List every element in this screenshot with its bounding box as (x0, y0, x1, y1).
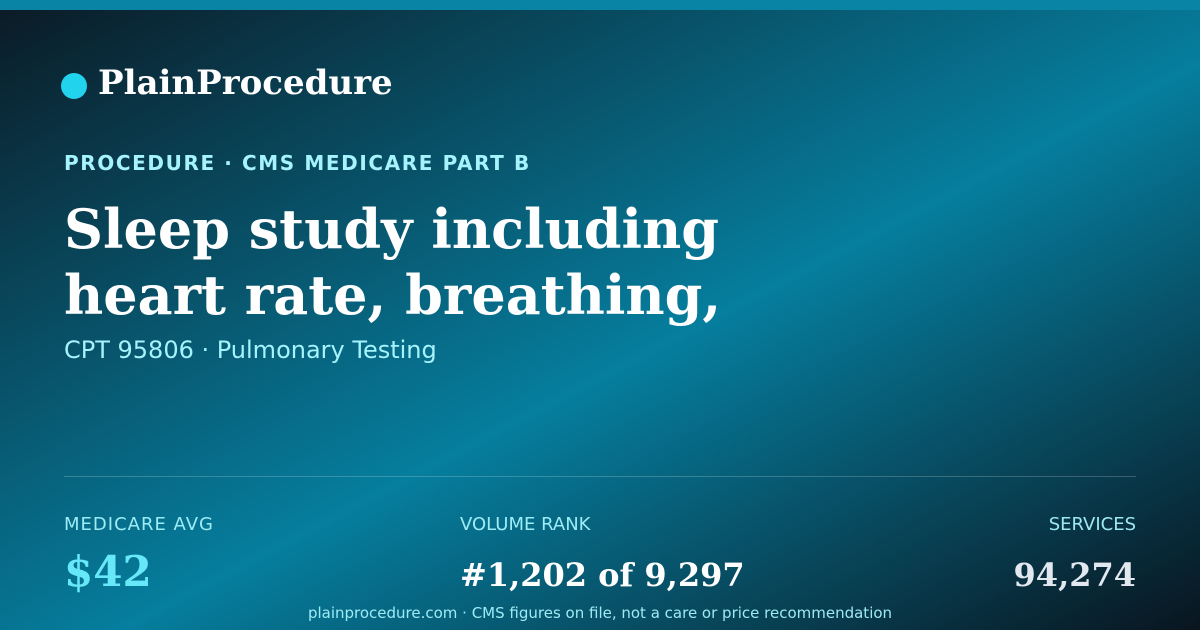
stat label: VOLUME RANK (460, 514, 590, 535)
stat: services (1014, 514, 1136, 594)
stat value: $42 (64, 547, 152, 596)
stat value: 94,274 (1014, 556, 1136, 594)
stat: medicare average (64, 514, 214, 596)
title (64, 197, 721, 327)
top accent bar (0, 0, 1200, 10)
stat value: #1,202 of 9,297 (460, 556, 745, 594)
title: Sleep study including (64, 197, 719, 261)
logo (61, 63, 393, 103)
icon: logo dot (61, 73, 87, 99)
stat: volume rank (460, 514, 745, 594)
footer note: plainprocedure.com · CMS figures on file, not a care or price recommendation (308, 604, 892, 622)
stat label: SERVICES (1049, 514, 1136, 535)
subtitle: CPT 95806 · Pulmonary Testing (64, 336, 437, 364)
stat label: MEDICARE AVG (64, 514, 214, 535)
eyebrow label: PROCEDURE · CMS MEDICARE PART B (64, 151, 531, 175)
brand name: PlainProcedure (98, 63, 393, 103)
title: heart rate, breathing, (64, 263, 721, 327)
divider (64, 476, 1136, 477)
